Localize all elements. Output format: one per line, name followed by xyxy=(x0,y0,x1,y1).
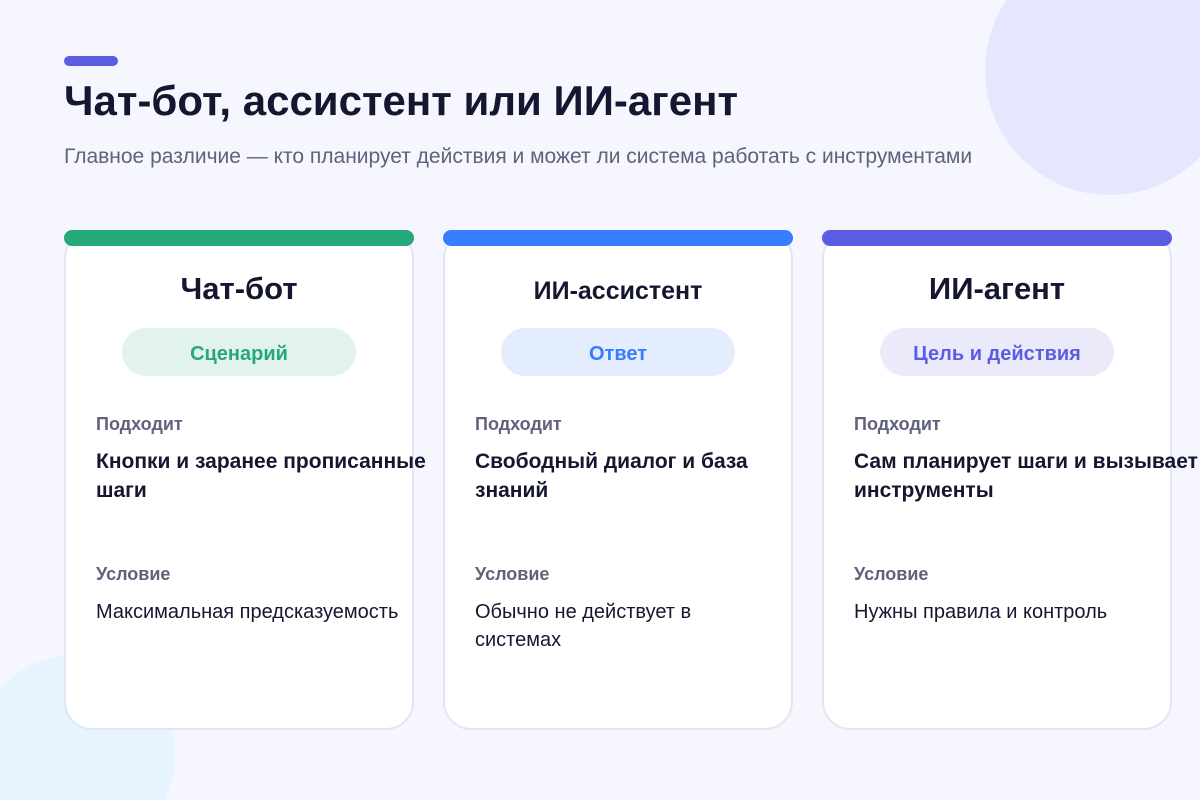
chat-bot label: condition: Условие xyxy=(96,564,170,584)
assistant label: fits: Подходит xyxy=(475,414,562,434)
chat-bot fits text xyxy=(96,450,426,502)
agent label: condition: Условие xyxy=(854,564,928,584)
assistant pill: Ответ xyxy=(589,343,647,365)
agent top bar xyxy=(822,230,1172,246)
assistant condition text: системах xyxy=(475,629,561,651)
assistant top bar xyxy=(443,230,793,246)
assistant fits text: Свободный диалог и база xyxy=(475,450,748,473)
chat-bot heading: Чат-бот xyxy=(180,271,298,306)
assistant condition text: Обычно не действует в xyxy=(475,601,691,623)
agent condition text: Нужны правила и контроль xyxy=(854,601,1107,623)
agent fits text: инструменты xyxy=(854,479,994,502)
assistant condition text xyxy=(475,601,691,651)
chat-bot pill: Сценарий xyxy=(190,343,288,365)
title accent xyxy=(64,56,118,66)
chat-bot pill xyxy=(122,328,356,376)
subtitle: Главное различие — кто планирует действия и может ли система работать с инструментами xyxy=(64,145,972,168)
chat-bot fits text: шаги xyxy=(96,479,147,502)
panel: chat-bot xyxy=(64,230,426,730)
panel: AI agent xyxy=(822,230,1198,730)
assistant fits text xyxy=(475,450,748,502)
chat-bot label: fits: Подходит xyxy=(96,414,183,434)
assistant pill xyxy=(501,328,735,376)
decorative circle: bottom left xyxy=(0,655,175,800)
chat-bot fits text: Кнопки и заранее прописанные xyxy=(96,450,426,473)
panel: AI assistant xyxy=(443,230,793,730)
decorative circle: top right xyxy=(985,0,1200,195)
title: Чат-бот, ассистент или ИИ-агент xyxy=(64,77,738,124)
assistant fits text: знаний xyxy=(475,479,548,502)
chat-bot condition text: Максимальная предсказуемость xyxy=(96,601,398,623)
agent fits text xyxy=(854,450,1198,502)
agent label: fits: Подходит xyxy=(854,414,941,434)
agent heading: ИИ-агент xyxy=(929,271,1065,306)
assistant label: condition: Условие xyxy=(475,564,549,584)
assistant heading: ИИ-ассистент xyxy=(534,277,702,305)
agent pill: Цель и действия xyxy=(913,343,1081,365)
chat-bot top bar xyxy=(64,230,414,246)
agent pill xyxy=(880,328,1114,376)
agent fits text: Сам планирует шаги и вызывает xyxy=(854,450,1198,473)
